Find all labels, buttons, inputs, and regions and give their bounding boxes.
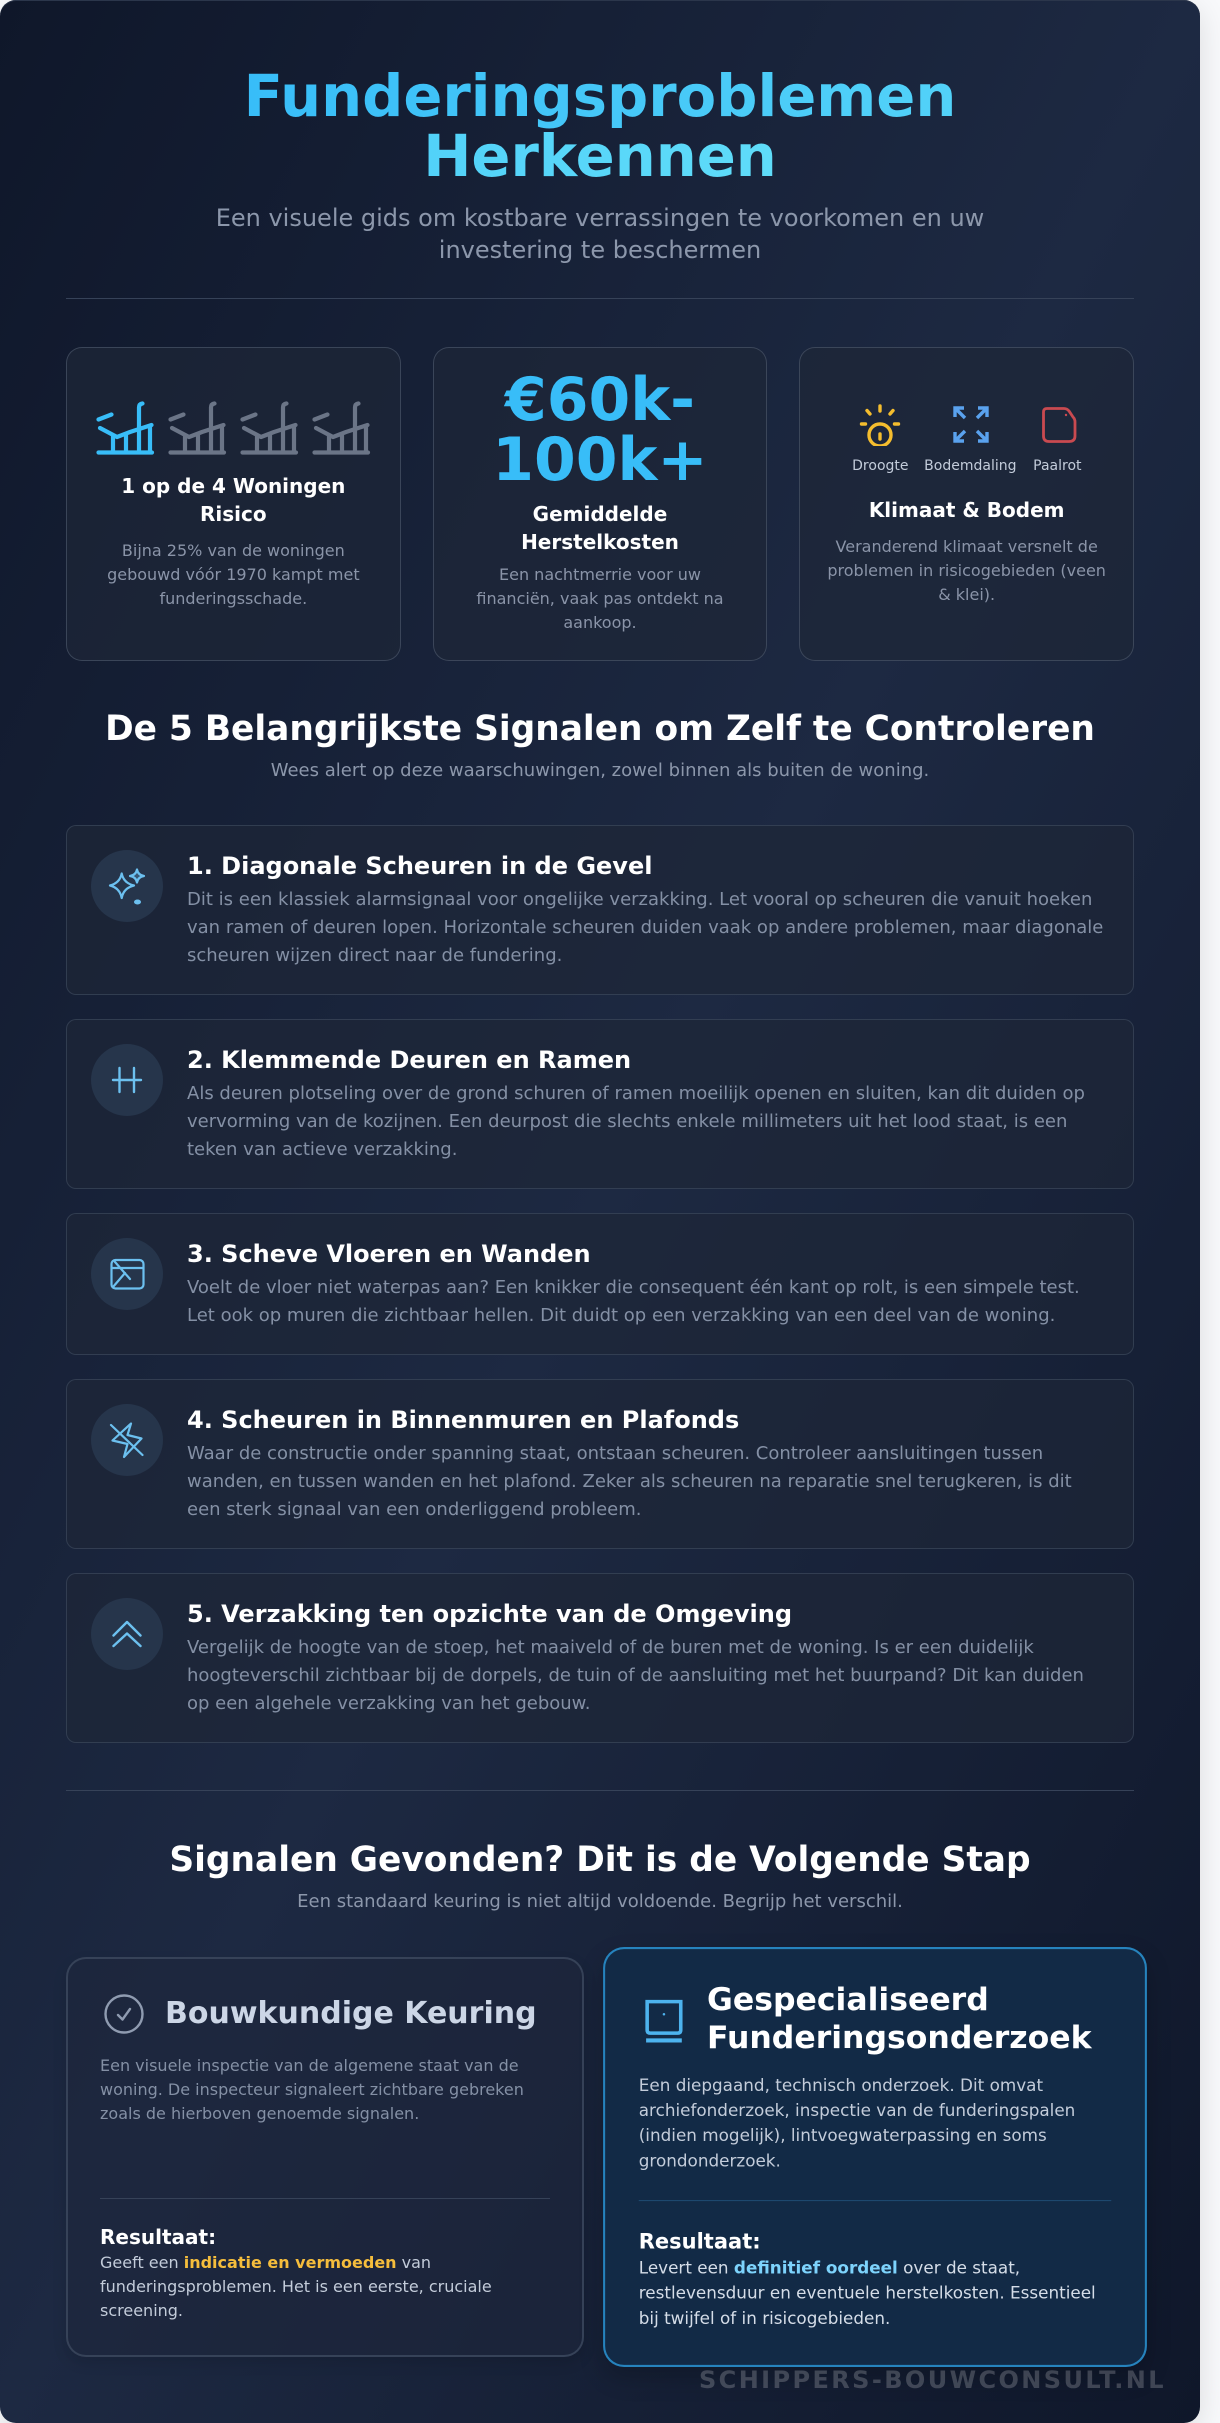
signal text: Voelt de vloer niet waterpas aan? Een knikker die consequent één kant op rolt, is een simpele test. — [187, 1277, 1080, 1298]
panel: repair costs statistic — [433, 347, 767, 661]
panel: signal 5 — [66, 1573, 1134, 1742]
card text: aankoop. — [563, 613, 637, 632]
signal title: 4. Scheuren in Binnenmuren en Plafonds — [187, 1406, 739, 1434]
icon: device — [645, 2000, 683, 2042]
signal text: Waar de constructie onder spanning staat, ontstaan scheuren. Controleer aansluitingen tussen — [187, 1443, 1043, 1464]
panel: climate and soil — [799, 347, 1134, 661]
panel: signal 2 — [66, 1019, 1134, 1188]
icon: pile rot — [1042, 407, 1076, 443]
heading — [707, 1981, 1092, 2056]
watermark: SCHIPPERS-BOUWCONSULT.NL — [699, 2366, 1166, 2394]
signal text: van ramen of deuren lopen. Horizontale scheuren duiden vaak op andere problemen, maar diagonale — [187, 917, 1103, 938]
heading: Funderingsonderzoek — [707, 2019, 1092, 2056]
signal text: wanden, en tussen wanden en het plafond. Zeker als scheuren na reparatie snel terugkeren, is dit — [187, 1471, 1072, 1492]
panel: signal 4 — [66, 1379, 1134, 1548]
icon label: Paalrot — [1033, 458, 1082, 474]
icon: double chevron up — [112, 1620, 142, 1648]
result text: screening. — [100, 2300, 183, 2320]
section subheading: signals: Wees alert op deze waarschuwingen, zowel binnen als buiten de woning. — [271, 760, 929, 781]
signal text — [187, 1083, 1085, 1160]
icon circle — [91, 1044, 163, 1116]
signal text — [187, 889, 1103, 966]
title — [244, 63, 956, 190]
icon label: Bodemdaling — [924, 458, 1016, 474]
section heading: signals: De 5 Belangrijkste Signalen om Zelf te Controleren — [105, 709, 1095, 749]
icon circle — [91, 850, 163, 922]
signal title: 1. Diagonale Scheuren in de Gevel — [187, 852, 652, 880]
icon circle — [91, 1238, 163, 1310]
card text — [827, 537, 1106, 604]
card heading: Gemiddelde — [533, 502, 667, 526]
signal text: Vergelijk de hoogte van de stoep, het maaiveld of de buren met de woning. Is er een duidelijk — [187, 1637, 1034, 1658]
icon: sparkles — [108, 868, 146, 904]
icon circle — [91, 1598, 163, 1670]
section subheading: next step: Een standaard keuring is niet altijd voldoende. Begrijp het verschil. — [297, 1891, 903, 1912]
heading: Gespecialiseerd — [707, 1981, 989, 2018]
icon: four houses, one highlighted — [96, 401, 370, 455]
subtitle: investering te beschermen — [439, 236, 761, 264]
result text — [100, 2252, 492, 2320]
icon: check circle — [104, 1994, 144, 2034]
result text: Levert een definitief oordeel over de staat, — [639, 2257, 1020, 2277]
signal text: op een algehele verzakking van het gebouw. — [187, 1693, 590, 1714]
result text — [639, 2257, 1096, 2328]
signal text — [187, 1443, 1072, 1520]
icon: soil subsidence arrows — [953, 406, 989, 443]
big number: 100k+ — [492, 425, 708, 495]
signal title: 2. Klemmende Deuren en Ramen — [187, 1046, 631, 1074]
icon circle — [91, 1404, 163, 1476]
card text: Veranderend klimaat versnelt de — [836, 537, 1098, 556]
result text: funderingsproblemen. Het is een eerste, cruciale — [100, 2276, 492, 2296]
subtitle: Een visuele gids om kostbare verrassingen te voorkomen en uw — [216, 204, 984, 232]
card text: problemen in risicogebieden (veen — [827, 561, 1106, 580]
icon: level lines — [112, 1066, 142, 1094]
result text: bij twijfel of in risicogebieden. — [639, 2308, 890, 2328]
signal text: teken van actieve verzakking. — [187, 1139, 457, 1160]
signal text: een sterk signaal van een onderliggend probleem. — [187, 1499, 642, 1520]
section heading: next step: Signalen Gevonden? Dit is de Volgende Stap — [169, 1840, 1031, 1880]
card text: Bijna 25% van de woningen — [122, 541, 345, 560]
description — [639, 2075, 1075, 2170]
card text: & klei). — [938, 585, 995, 604]
signal text: scheuren wijzen direct naar de fundering. — [187, 945, 562, 966]
big number — [492, 365, 708, 495]
result label: Resultaat: — [100, 2224, 216, 2248]
card heading: 1 op de 4 Woningen — [121, 474, 345, 498]
signal text: hoogteverschil zichtbaar bij de dorpels, de tuin of de aansluiting met het buurpand? Dit kan duiden — [187, 1665, 1084, 1686]
card text — [107, 541, 360, 608]
signal text: Dit is een klassiek alarmsignaal voor ongelijke verzakking. Let vooral op scheuren die vanuit hoeken — [187, 889, 1092, 910]
panel: building inspection — [66, 1956, 584, 2356]
panel: signal 1 — [66, 825, 1134, 994]
result text: restlevensduur en eventuele herstelkosten. Essentieel — [639, 2282, 1096, 2302]
title: Herkennen — [423, 123, 777, 190]
card heading: Herstelkosten — [521, 530, 679, 554]
signal title: 3. Scheve Vloeren en Wanden — [187, 1240, 591, 1268]
description: zoals de hierboven genoemde signalen. — [100, 2104, 419, 2122]
card heading — [521, 502, 679, 554]
description — [100, 2056, 524, 2122]
description: woning. De inspecteur signaleert zichtbare gebreken — [100, 2080, 524, 2098]
icon: drought sun — [860, 404, 900, 446]
card heading: Risico — [200, 502, 267, 526]
panel: risk statistic — [66, 347, 401, 661]
signal text: Let ook op muren die zichtbaar hellen. Dit duidt op een verzakking van een deel van de woning. — [187, 1305, 1055, 1326]
signal text — [187, 1637, 1084, 1714]
icon label: Droogte — [852, 458, 909, 474]
panel: signal 3 — [66, 1213, 1134, 1354]
card text: financiën, vaak pas ontdekt na — [476, 589, 724, 608]
description: Een visuele inspectie van de algemene staat van de — [100, 2056, 519, 2074]
description: Een diepgaand, technisch onderzoek. Dit omvat — [639, 2075, 1043, 2095]
icon: window with slanted lines — [110, 1258, 145, 1290]
signal text — [187, 1277, 1080, 1326]
description: grondonderzoek. — [639, 2150, 781, 2170]
card heading — [121, 474, 345, 526]
signal text: Als deuren plotseling over de grond schuren of ramen moeilijk openen en sluiten, kan dit duiden op — [187, 1083, 1085, 1104]
description: archiefonderzoek, inspectie van de funderingspalen — [639, 2100, 1075, 2120]
big number: €60k- — [505, 365, 695, 435]
panel: specialised foundation survey — [603, 1946, 1147, 2366]
result text: Geeft een indicatie en vermoeden van — [100, 2252, 431, 2272]
subtitle — [216, 204, 984, 264]
card text: Een nachtmerrie voor uw — [499, 565, 701, 584]
heading: Bouwkundige Keuring — [165, 1996, 537, 2030]
icon: struck-through bolt — [110, 1422, 144, 1458]
card text — [476, 565, 724, 632]
description: (indien mogelijk), lintvoegwaterpassing en soms — [639, 2125, 1047, 2145]
card heading: Klimaat & Bodem — [869, 498, 1064, 522]
card text: funderingsschade. — [159, 589, 307, 608]
title: Funderingsproblemen — [244, 63, 956, 130]
signal title: 5. Verzakking ten opzichte van de Omgeving — [187, 1600, 792, 1628]
signal text: vervorming van de kozijnen. Een deurpost die slechts enkele millimeters uit het lood staat, is een — [187, 1111, 1067, 1132]
card text: gebouwd vóór 1970 kampt met — [107, 565, 360, 584]
result label: Resultaat: — [639, 2228, 761, 2253]
